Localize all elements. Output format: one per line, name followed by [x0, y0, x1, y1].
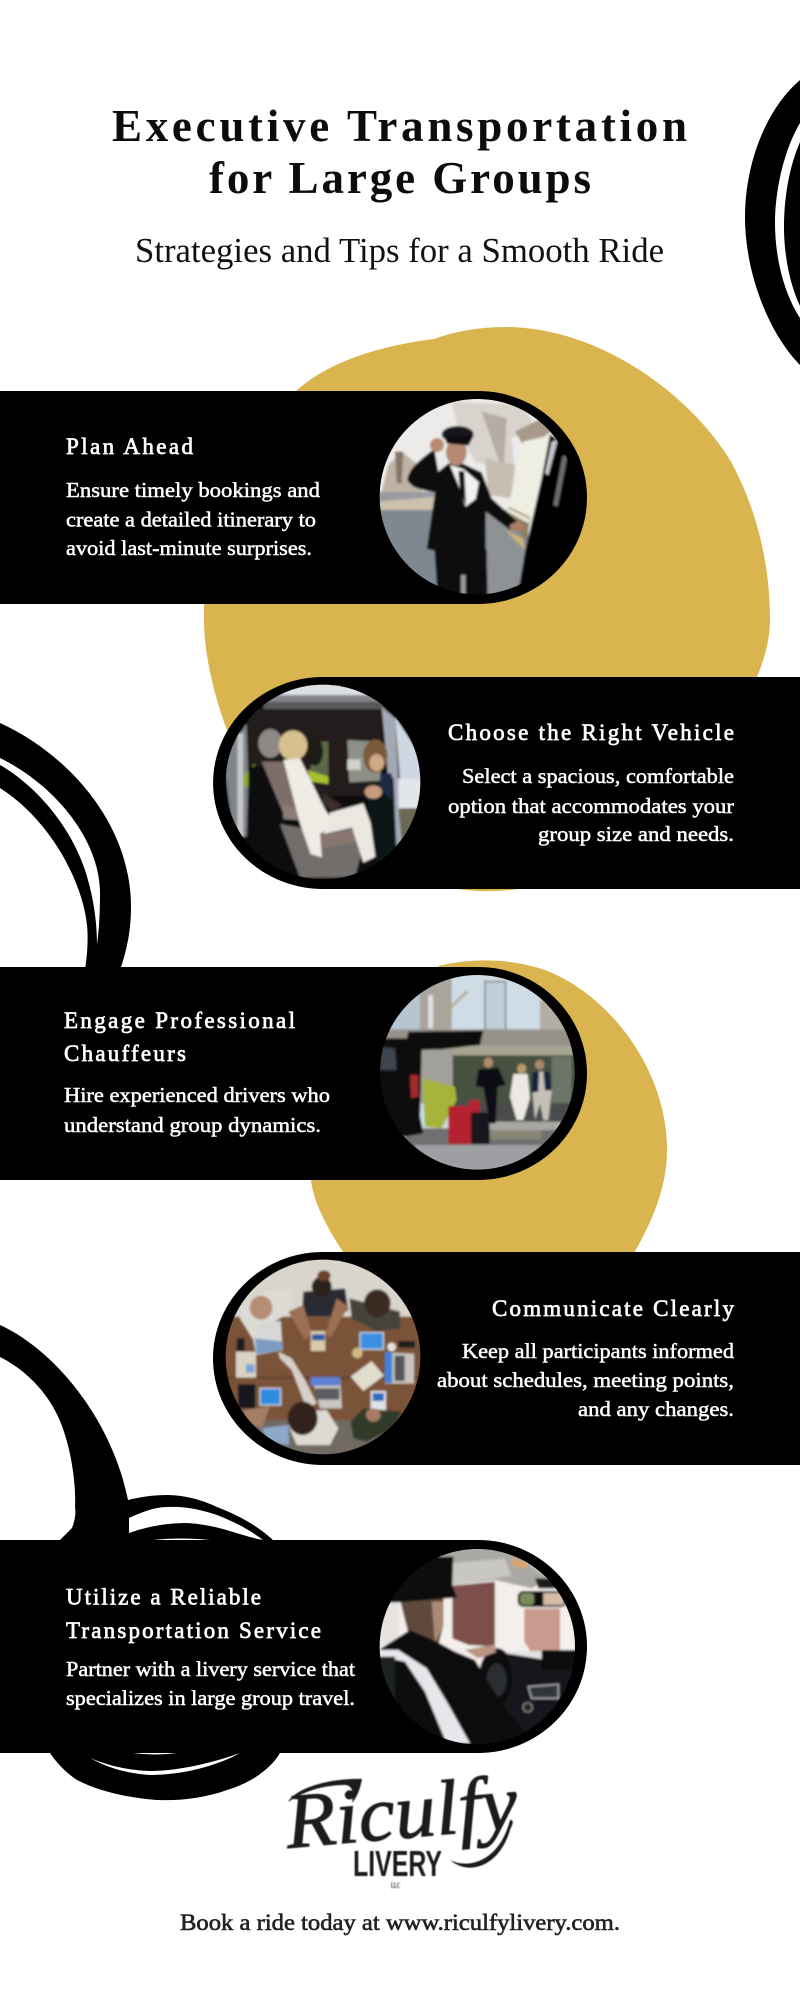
- decorative ring: top right: [745, 80, 800, 365]
- heading: Choose the Right Vehicle: [448, 720, 734, 745]
- body text: understand group dynamics.: [64, 1113, 321, 1137]
- photo: chauffeur tipping cap beside van: [380, 399, 568, 594]
- body text: [66, 478, 320, 560]
- panel: communicate clearly: [213, 1252, 800, 1465]
- body text: specializes in large group travel.: [66, 1686, 355, 1710]
- heading: Plan Ahead: [66, 434, 194, 459]
- logo: Riculfy: [281, 1758, 521, 1865]
- logo: LIVERY: [353, 1843, 442, 1884]
- panel: engage professional chauffeurs: [0, 967, 587, 1180]
- body text: Partner with a livery service that: [66, 1657, 355, 1681]
- panel: utilize a reliable transportation service: [66, 1540, 587, 1753]
- body text: Select a spacious, comfortable: [462, 764, 734, 788]
- photo: team at table seen from above: [226, 1260, 420, 1454]
- title: [112, 101, 687, 203]
- photo: passengers seated in van: [226, 684, 420, 880]
- heading: Transportation Service: [66, 1618, 321, 1643]
- heading: Communicate Clearly: [492, 1296, 734, 1321]
- title: Executive Transportation: [112, 101, 687, 151]
- panel: choose the right vehicle: [213, 677, 800, 889]
- panel shape: [0, 967, 587, 1180]
- heading: Chauffeurs: [64, 1041, 186, 1066]
- decorative ring: lower left: [0, 1325, 290, 1800]
- heading: [66, 1584, 321, 1643]
- body text: group size and needs.: [538, 822, 734, 846]
- body text: avoid last-minute surprises.: [66, 536, 312, 560]
- title: for Large Groups: [209, 153, 591, 203]
- panel shape: [213, 1252, 800, 1465]
- subtitle: Strategies and Tips for a Smooth Ride: [135, 231, 664, 270]
- panel shape: [213, 677, 800, 889]
- footer call to action: Book a ride today at www.riculfylivery.com.: [180, 1910, 620, 1935]
- body text: [66, 1657, 355, 1710]
- body text: Hire experienced drivers who: [64, 1083, 330, 1107]
- body text: [437, 1339, 734, 1421]
- logo: LLC: [391, 1881, 400, 1890]
- body text: Keep all participants informed: [462, 1339, 734, 1363]
- body text: option that accommodates your: [448, 794, 734, 818]
- heading: [64, 1008, 295, 1066]
- panel shape: [0, 391, 587, 604]
- body text: about schedules, meeting points,: [437, 1368, 734, 1392]
- decorative ring: middle left: [0, 723, 131, 970]
- body text: and any changes.: [578, 1397, 734, 1421]
- photo: chauffeur driving seen from back seat: [380, 1549, 575, 1744]
- photo: travellers walking to van with luggage: [380, 975, 575, 1170]
- panel shape: [0, 1540, 587, 1753]
- body text: [448, 764, 734, 846]
- gold blob: upper: [204, 327, 770, 891]
- heading: Engage Professional: [64, 1008, 295, 1033]
- body text: create a detailed itinerary to: [66, 508, 316, 532]
- heading: Utilize a Reliable: [66, 1584, 261, 1610]
- body text: Ensure timely bookings and: [66, 478, 320, 502]
- panel: plan ahead: [0, 391, 587, 604]
- gold blob: lower: [311, 960, 667, 1255]
- body text: [64, 1083, 330, 1137]
